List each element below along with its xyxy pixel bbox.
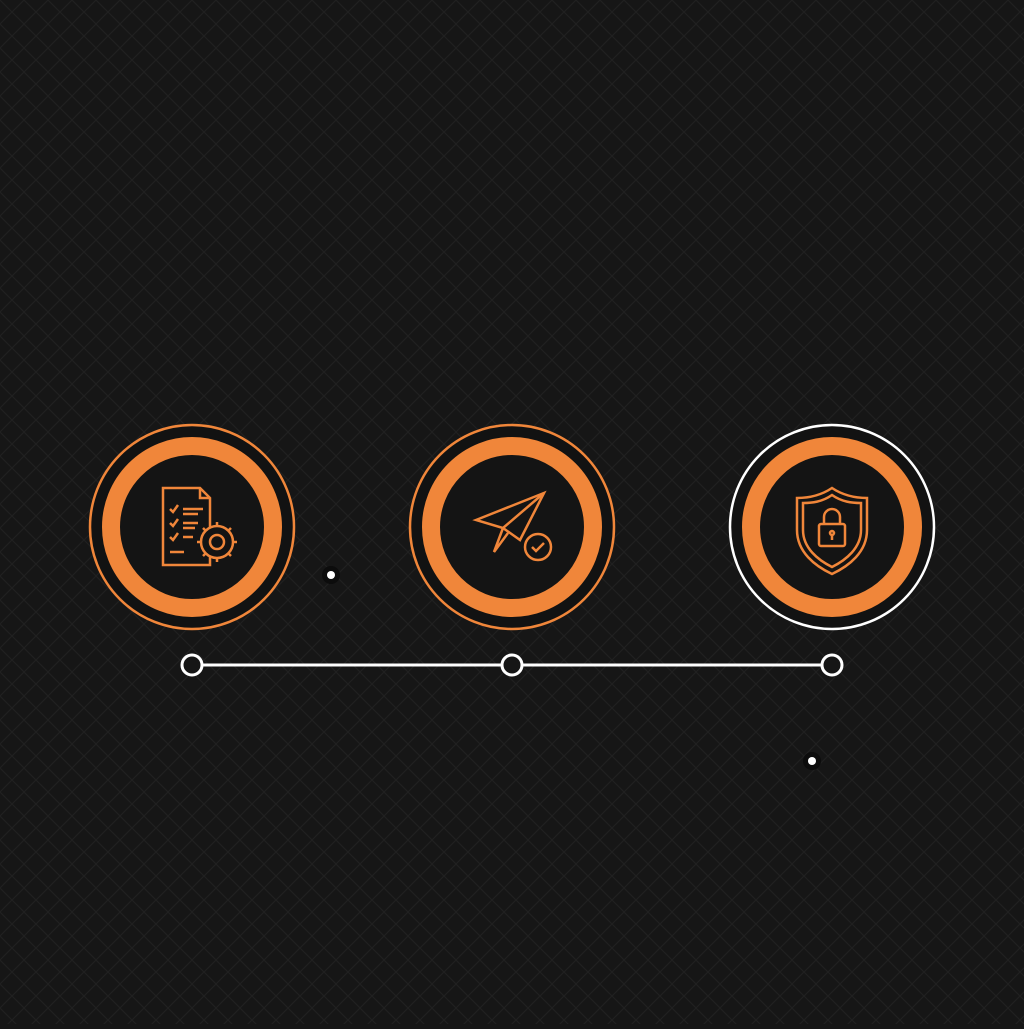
icon: checklist document gear xyxy=(163,488,237,565)
step 3: shield lock xyxy=(730,425,934,629)
step 1: document with gear xyxy=(90,425,294,629)
step 2: paper plane xyxy=(410,425,614,629)
dot marker 2 xyxy=(803,752,821,770)
dot marker 1 xyxy=(322,566,340,584)
icon: shield with padlock xyxy=(797,488,867,574)
icon: paper plane with check xyxy=(476,493,551,560)
timeline xyxy=(182,655,842,675)
